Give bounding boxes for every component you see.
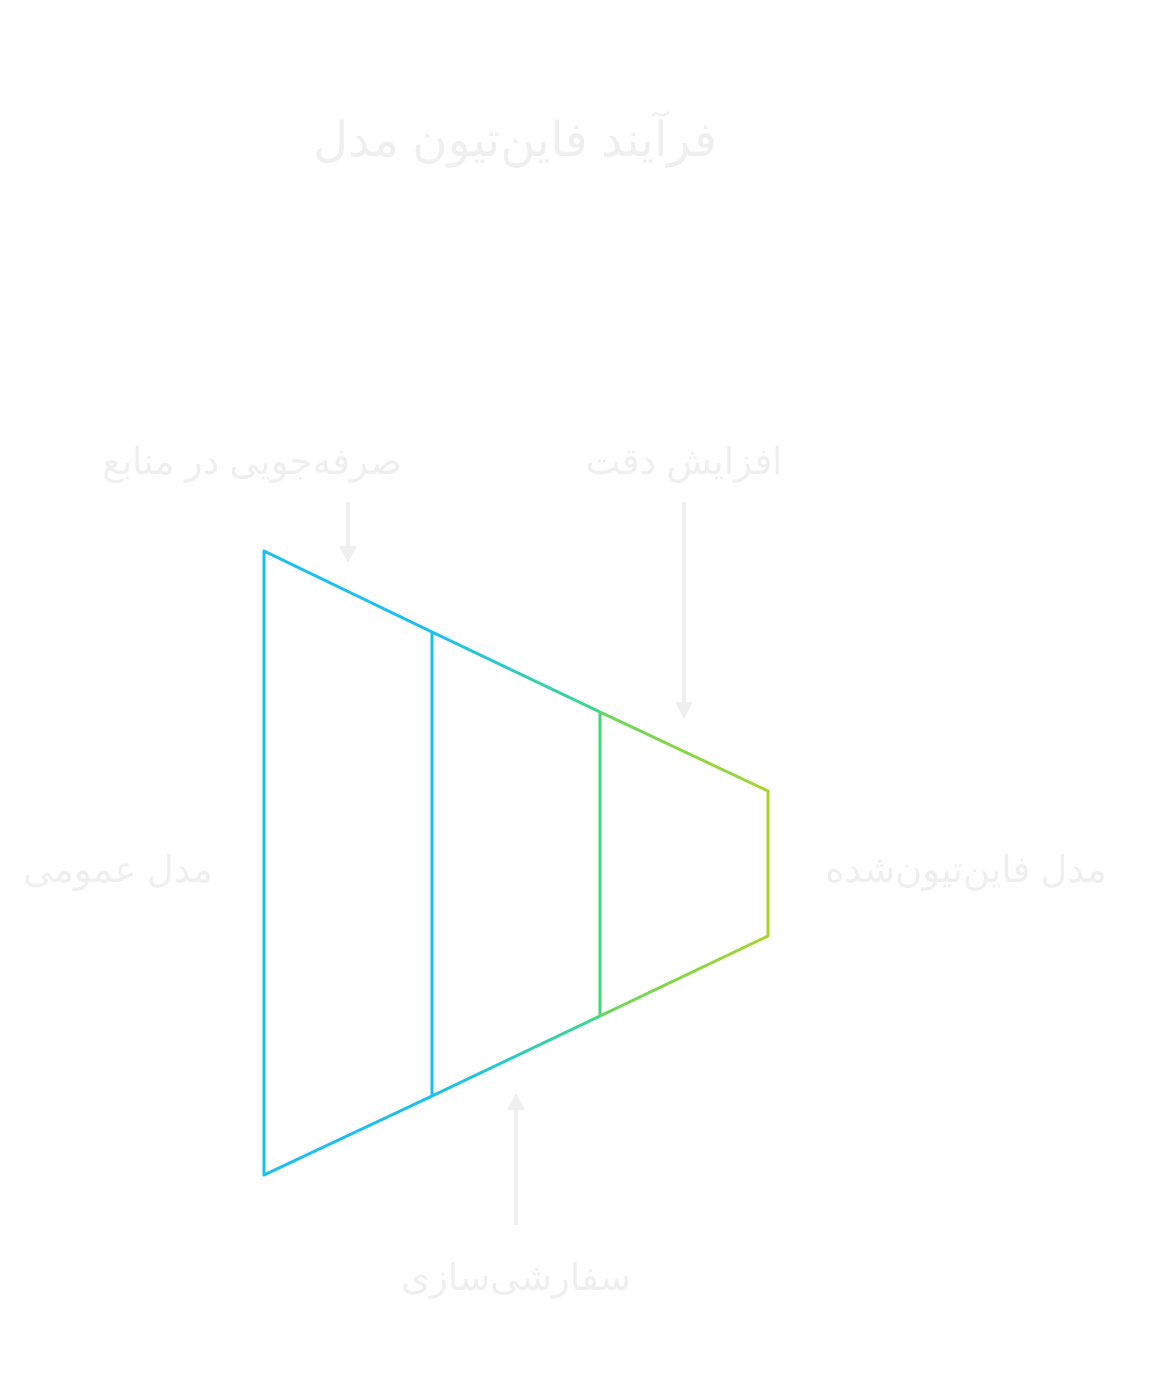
- label: resource saving: صرفه‌جویی در منابع: [102, 441, 402, 483]
- title: فرآیند فاین‌تیون مدل: [313, 110, 717, 168]
- label: increased accuracy: افزایش دقت: [586, 441, 782, 483]
- segment: fine-tuned stage: [600, 712, 768, 1016]
- arrow: increased accuracy: [675, 502, 693, 719]
- segment: customization stage: [432, 632, 600, 1096]
- label: customization: سفارشی‌سازی: [401, 1257, 631, 1299]
- arrow: customization: [507, 1093, 525, 1225]
- segment: general model stage: [264, 551, 432, 1175]
- arrow: resource saving: [339, 502, 357, 563]
- label: general model: مدل عمومی: [23, 849, 213, 891]
- label: fine-tuned model: مدل فاین‌تیون‌شده: [825, 849, 1107, 891]
- funnel diagram: [264, 551, 768, 1175]
